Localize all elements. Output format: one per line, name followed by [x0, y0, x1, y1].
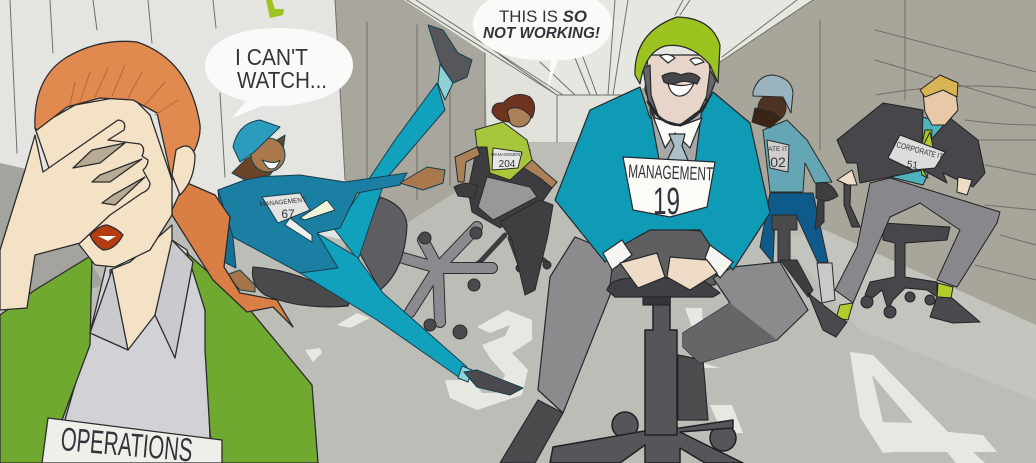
- left thigh: [538, 237, 620, 413]
- racer: hooded man, corporate IT 02: ATE IT: [768, 146, 788, 153]
- legs: [500, 200, 553, 295]
- floor number 3: [445, 310, 532, 410]
- eyes: [660, 54, 675, 63]
- floor number 4: [850, 352, 997, 463]
- neck: [110, 225, 172, 350]
- green sign fragment: [266, 0, 284, 18]
- jacket: [555, 87, 770, 270]
- jacket left: [0, 255, 92, 463]
- collar: [90, 240, 193, 358]
- skirt: [478, 177, 537, 220]
- bib 204: [492, 148, 522, 170]
- racer: front man with green helmet, management 19: [500, 17, 808, 463]
- shoe: [817, 263, 835, 303]
- racer: blond man in dark suit, corporate IT 51: [808, 75, 1000, 337]
- shirt: [55, 240, 220, 463]
- speech bubble: this is so not working: [473, 0, 612, 88]
- floor dash marks: [305, 308, 743, 433]
- lower leg: [300, 233, 467, 378]
- green helmet: [635, 17, 720, 84]
- jacket: [218, 173, 407, 273]
- armrest: [454, 183, 478, 198]
- racer: falling man in teal suit, number 67: MANAGEMENT: [259, 197, 306, 208]
- cuffs: [603, 240, 632, 270]
- hands: [620, 253, 665, 288]
- head: [923, 85, 958, 125]
- helmet: [233, 120, 280, 162]
- lower shoe: [464, 370, 523, 395]
- hair: [35, 41, 200, 180]
- raised shoe: [428, 25, 472, 83]
- racer: front man with green helmet, management 19: MANAGEMENT: [628, 162, 714, 185]
- shirt and paper: [285, 218, 312, 242]
- racer: falling man in teal suit, number 67: [218, 25, 523, 395]
- seat: [607, 278, 720, 297]
- tie: [918, 130, 932, 178]
- lower left leg: [500, 400, 563, 463]
- face: [35, 95, 172, 267]
- hair: [920, 75, 958, 97]
- speech bubble: I can't watch: I CAN'T: [235, 44, 308, 70]
- speech bubble: I can't watch: WATCH...: [237, 67, 327, 93]
- racer: front man with green helmet, management 19: 19: [653, 181, 680, 223]
- race number bib: [623, 157, 715, 217]
- trousers: [835, 178, 1000, 303]
- hand: [816, 182, 838, 201]
- middle trousers: [610, 228, 720, 285]
- racer: woman in lime blouse, number 204: MANAGEMENT: [491, 152, 523, 157]
- hand: [400, 167, 445, 190]
- racer: hooded man, corporate IT 02: [752, 75, 838, 303]
- floor markings: [305, 308, 997, 463]
- speech bubble: this is so not working: NOT WORKING!: [483, 25, 601, 42]
- bib 67: [262, 193, 310, 223]
- racer: blond man in dark suit, corporate IT 51: 51: [906, 159, 919, 172]
- ponytail: [172, 182, 293, 327]
- shirt: [650, 108, 702, 165]
- speech bubble: I can't watch: [205, 28, 353, 118]
- finger gaps: [73, 143, 145, 205]
- bib: [888, 135, 945, 170]
- office chair: front racer chair: [550, 297, 743, 463]
- socks: [836, 303, 853, 320]
- chair: [772, 215, 797, 262]
- racer: hooded man, corporate IT 02: 02: [770, 154, 786, 170]
- lower hand: [226, 270, 255, 292]
- right thigh: [683, 262, 808, 363]
- speech bubble: this is so not working: THIS IS SO: [499, 7, 587, 26]
- ear: [172, 146, 195, 195]
- racer: woman in lime blouse, number 204: [454, 95, 557, 295]
- raised leg: [335, 83, 445, 260]
- office chair: corporate IT chair: [844, 175, 950, 318]
- chair base: [480, 235, 546, 265]
- chin strap: [648, 100, 708, 125]
- mouth: [668, 83, 694, 96]
- head: [645, 55, 712, 125]
- hands: [837, 170, 857, 185]
- head: [232, 135, 285, 180]
- racer: woman in lime blouse, number 204: 204: [499, 159, 516, 170]
- jacket: [837, 103, 985, 187]
- jacket right: [187, 253, 318, 463]
- moustache: [662, 73, 700, 84]
- shoes: [808, 293, 847, 337]
- head: [507, 103, 531, 127]
- bib: [767, 140, 789, 172]
- racer: falling man in teal suit, number 67: 67: [281, 207, 295, 221]
- head: [758, 94, 786, 122]
- blouse: [475, 122, 532, 180]
- lower right leg: [678, 355, 708, 420]
- jeans: [760, 193, 828, 263]
- hoodie: [763, 120, 832, 192]
- hand and forearm: [0, 120, 150, 310]
- racer: blond man in dark suit, corporate IT 51: CORPORATE IT: [895, 140, 944, 161]
- lips: [90, 225, 123, 250]
- office chair: falling racer chair: [252, 197, 492, 339]
- name bib: [42, 418, 222, 463]
- foreground woman: operations: [0, 41, 318, 463]
- chair back and seat: [468, 147, 552, 228]
- tie: [665, 134, 690, 165]
- arms: [455, 147, 557, 188]
- shirt: [890, 117, 948, 185]
- helmet: [753, 75, 793, 113]
